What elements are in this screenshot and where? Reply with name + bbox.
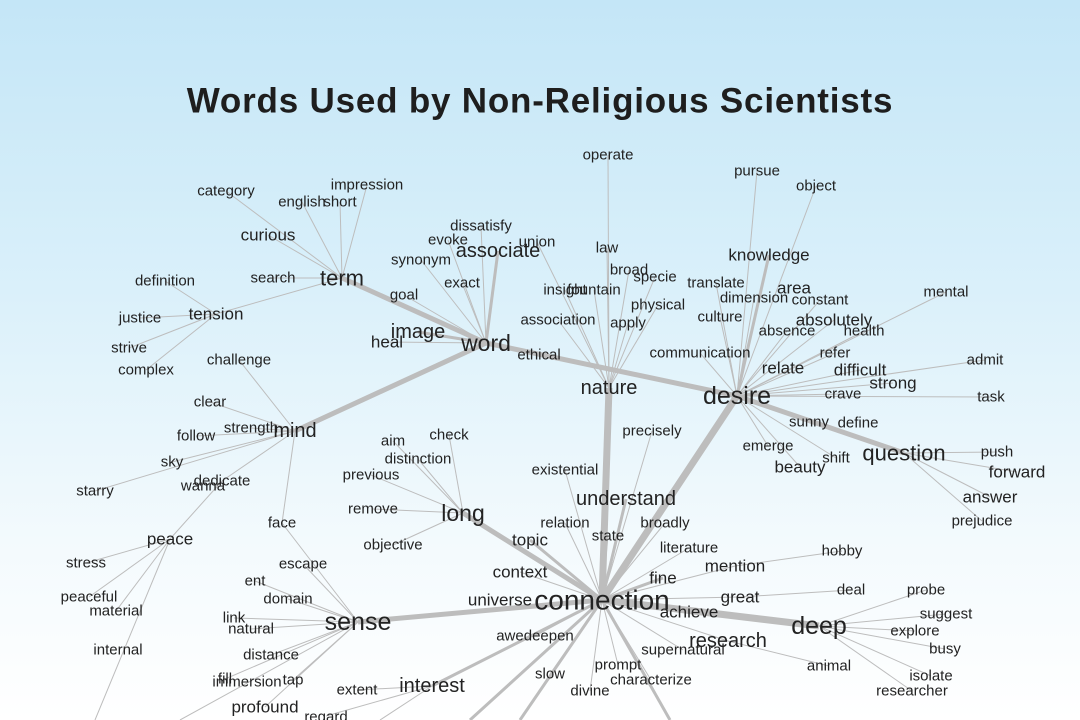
word labels: specie [633,268,677,286]
word labels: union [519,234,555,250]
word labels: dedicate [194,472,250,490]
word labels: strong [869,374,917,392]
word labels: suggest [920,606,973,622]
word labels: term [320,266,364,290]
word labels: busy [929,640,961,658]
word labels: admit [967,352,1004,368]
word labels: ethical [517,346,561,364]
word labels: health [844,322,884,340]
word labels: translate [687,274,745,292]
word labels: extent [337,682,378,698]
word labels: distance [243,646,299,664]
word labels: push [981,444,1013,460]
word labels: nature [581,377,637,399]
word labels: mental [923,284,969,300]
word labels: beauty [774,458,826,476]
word labels [61,146,1045,720]
word labels: remove [348,500,398,518]
word labels: peaceful [61,588,117,606]
word labels: previous [343,466,399,484]
word labels: dissatisfy [450,218,512,234]
word labels: answer [963,488,1018,506]
word labels: dimension [720,290,788,306]
word labels: great [721,588,760,606]
word labels: probe [907,582,945,598]
word labels: short [323,194,358,210]
word labels: material [89,602,143,620]
word labels: area [777,278,812,298]
word labels: culture [697,308,743,326]
word labels: state [592,528,624,544]
word labels: slow [535,666,565,682]
word labels: pursue [734,162,780,180]
word labels: escape [279,556,327,572]
word labels: relation [540,514,590,532]
word labels: aim [381,432,405,450]
word labels: tension [189,304,243,324]
word labels: context [493,562,548,582]
title: Words Used by Non-Religious Scientists [187,82,893,120]
word labels: broadly [640,514,690,532]
word labels: broad [610,262,648,278]
word labels: difficult [834,360,887,380]
word labels: absence [759,322,815,340]
word labels: existential [532,462,598,478]
word labels: insight [543,282,588,298]
word labels: evoke [428,232,468,248]
word labels: task [977,388,1005,406]
word labels: hobby [822,542,863,560]
word labels: objective [363,536,423,554]
word labels: explore [890,622,940,640]
word labels: characterize [610,672,692,688]
word labels: synonym [391,252,451,268]
word labels: follow [177,428,215,444]
word labels: achieve [660,602,718,622]
word labels: definition [135,272,195,290]
word labels: deal [837,582,865,598]
word labels: divine [570,682,610,700]
word labels: association [520,312,596,328]
word labels: justice [118,310,161,326]
word labels: absolutely [796,310,873,330]
word labels: complex [118,362,174,378]
word labels: awedeepen [496,628,574,644]
word labels: distinction [385,450,451,468]
word labels: check [429,426,469,444]
word labels: impression [331,176,403,194]
word labels: peace [147,530,193,548]
word labels: tap [283,672,303,688]
word labels: wanna [180,478,226,494]
word labels: universe [468,590,532,610]
word labels: image [391,321,445,343]
word labels: internal [93,642,143,658]
word labels: isolate [909,668,953,684]
word labels: fill [218,670,232,688]
word labels: challenge [207,352,271,368]
word labels: exact [444,274,481,292]
word labels: relate [762,358,804,378]
word labels: profound [231,698,299,716]
word labels: connection [534,584,670,616]
word labels: mind [273,420,317,442]
word labels: interest [399,675,465,697]
word labels: fine [649,568,677,588]
word labels: search [250,270,296,286]
word labels: deep [791,612,847,640]
word labels: ent [245,572,266,590]
word labels: law [596,240,618,256]
word labels: animal [807,658,851,674]
word labels: literature [660,540,718,556]
word labels: immersion [212,674,282,690]
word labels: prejudice [952,512,1012,530]
word labels: fountain [567,282,621,298]
word labels: link [223,610,246,626]
word labels: prompt [595,656,642,674]
word labels: long [441,500,485,526]
word labels: researcher [876,682,948,700]
word labels: face [268,514,296,532]
word labels: sense [325,608,391,636]
word labels: topic [512,530,548,550]
word labels: define [838,414,878,432]
word labels: sunny [789,414,830,430]
word labels: mention [705,556,765,576]
word labels: strive [111,340,147,356]
word labels: sky [161,454,184,470]
word labels: word [460,330,511,356]
word labels: constant [792,292,849,308]
word labels: stress [66,554,106,572]
word labels: physical [631,296,685,314]
word labels: precisely [622,422,682,440]
word labels: category [197,182,255,200]
word labels: communication [650,344,750,362]
word labels: operate [583,146,633,164]
word labels: associate [456,240,540,262]
word labels: desire [703,382,771,410]
word labels: object [796,178,837,194]
word labels: curious [241,226,295,244]
word labels: question [862,440,946,466]
word labels: emerge [743,438,793,454]
word labels: natural [228,620,274,638]
word labels: domain [263,590,313,608]
word labels: understand [576,488,676,510]
word labels: refer [820,344,850,362]
word labels: shift [822,450,851,466]
word labels: strength [224,420,278,436]
word labels: apply [610,314,646,332]
word labels: english [278,194,326,210]
word labels: knowledge [728,246,810,264]
word labels: research [689,630,767,652]
word labels: heal [371,332,403,352]
word labels: starry [76,482,114,500]
word labels: supernatural [641,642,725,658]
word labels: goal [390,286,418,304]
word labels: forward [989,462,1045,482]
word labels: clear [194,394,226,410]
network edges [86,155,1017,720]
word labels: crave [825,386,861,402]
